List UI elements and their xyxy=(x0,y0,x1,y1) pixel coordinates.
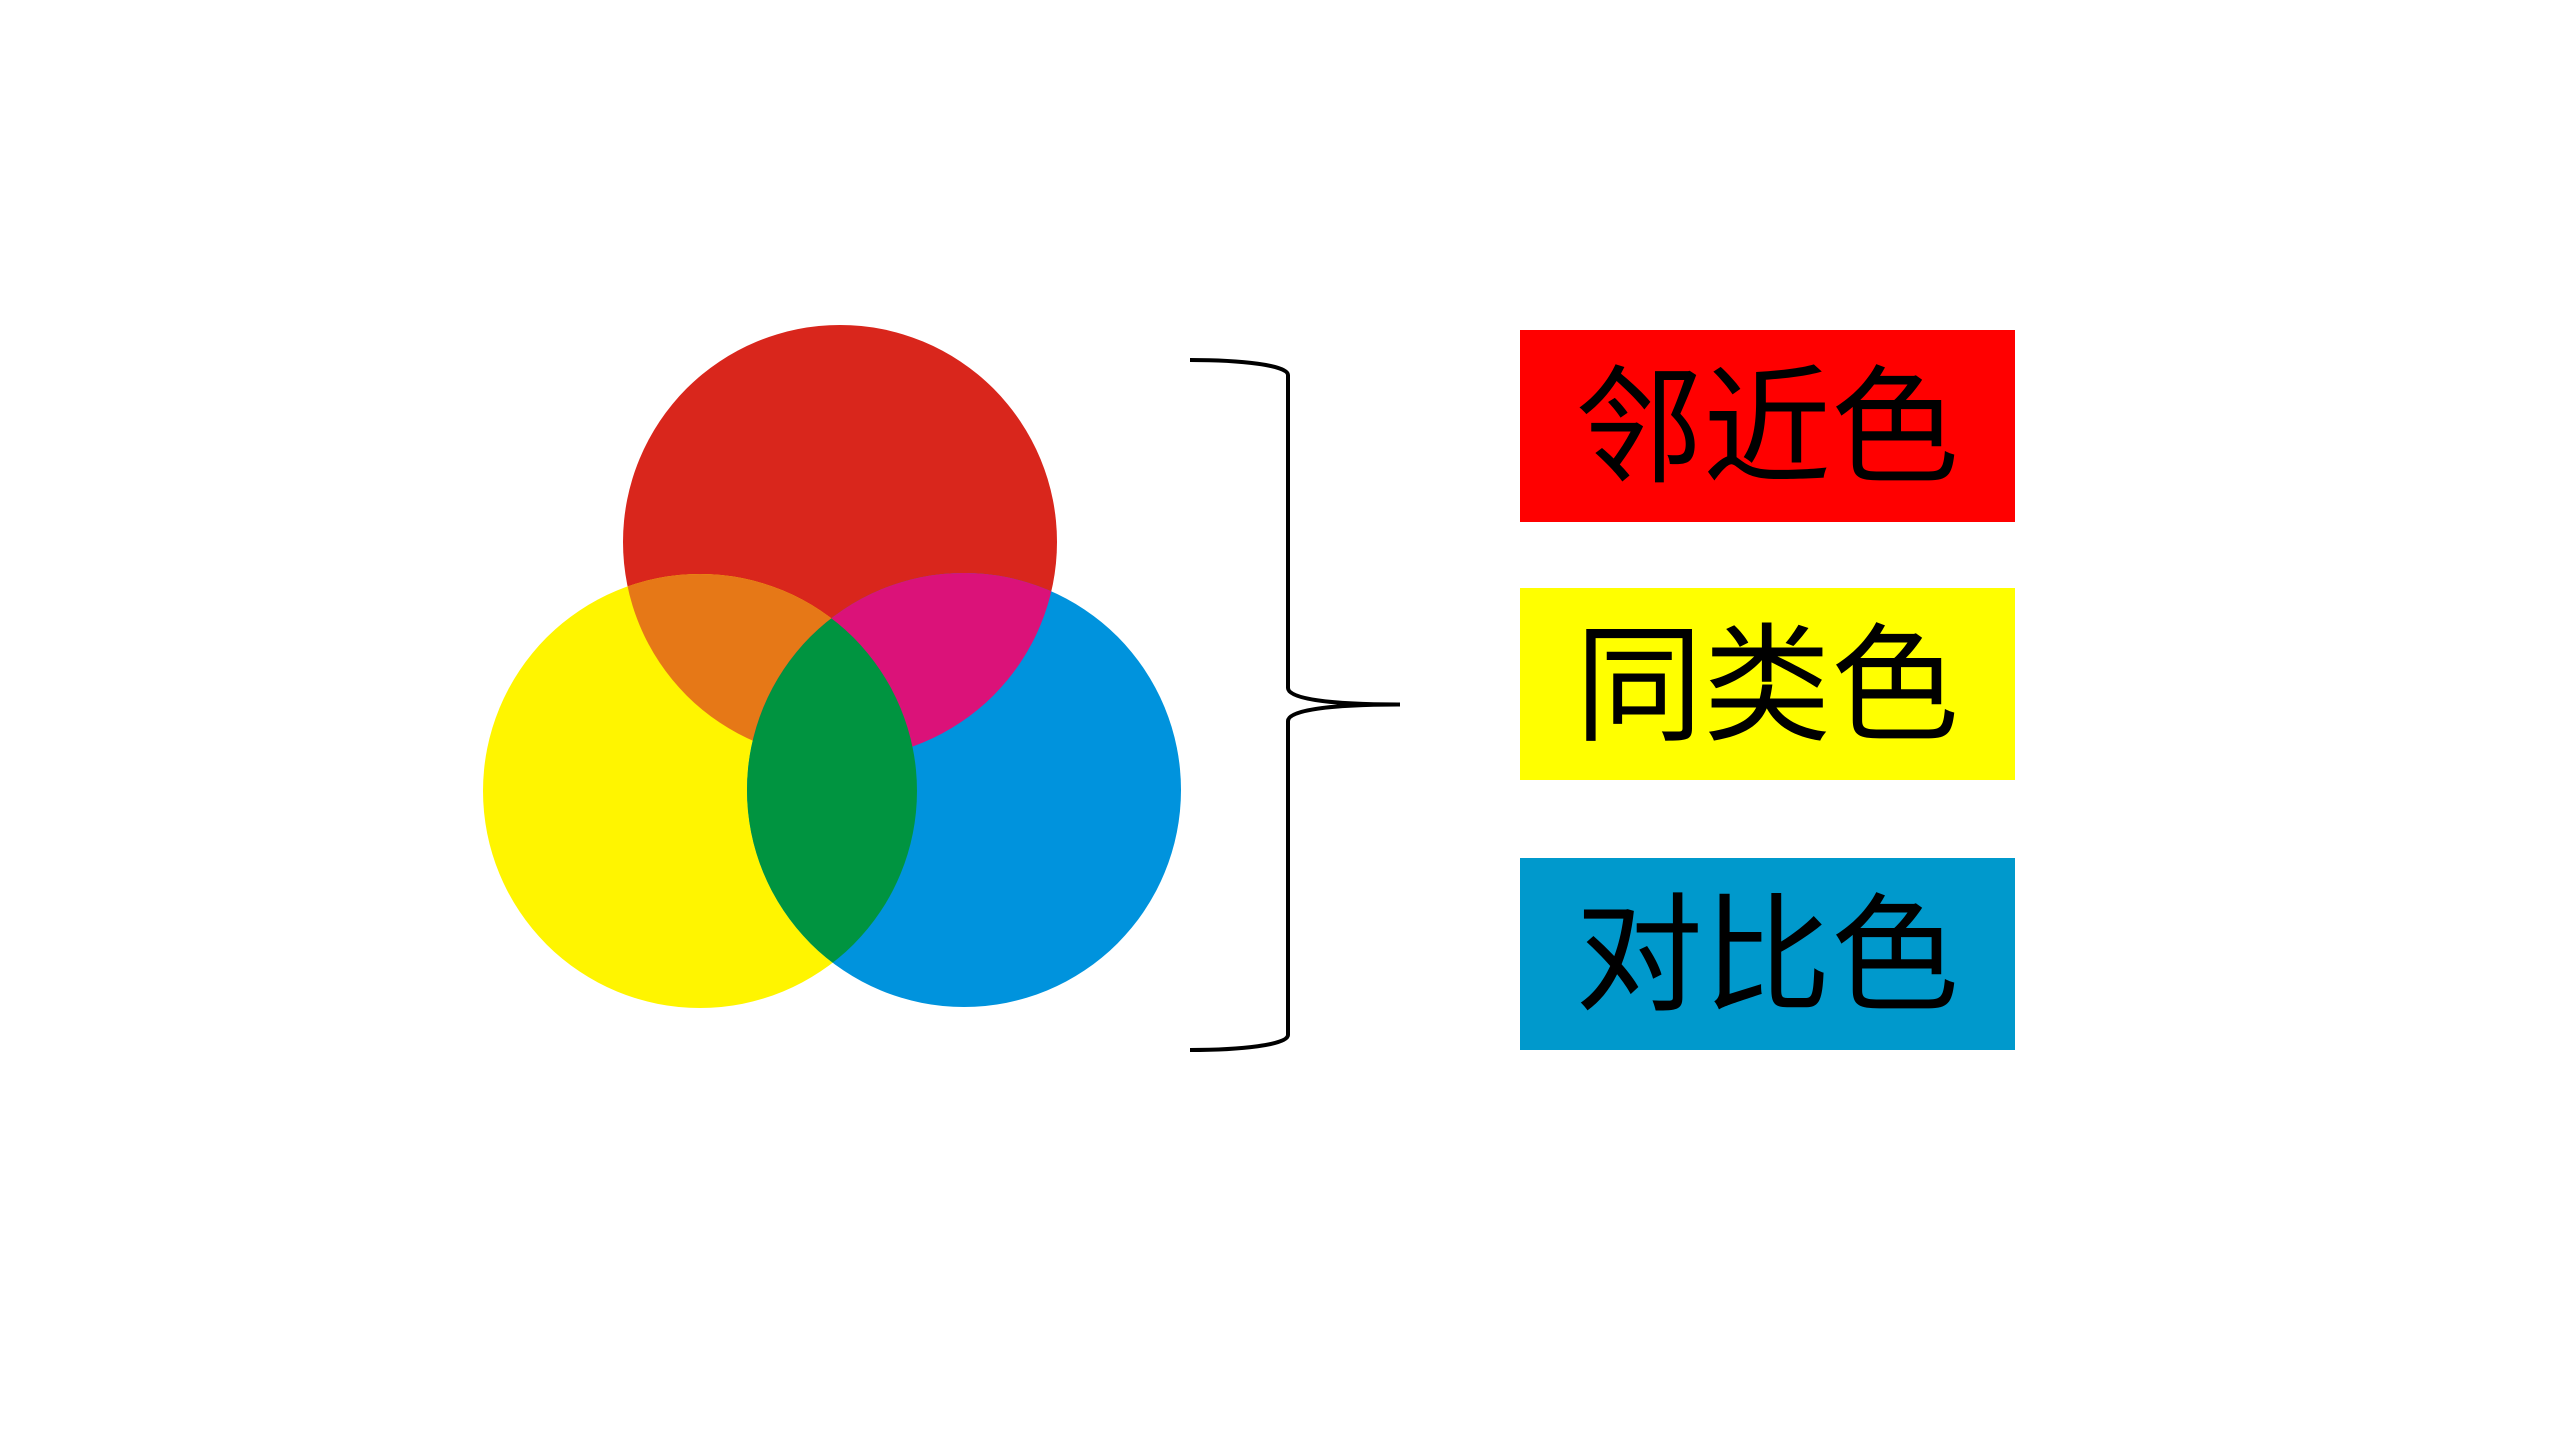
label box: analogous colours, yellow: 同类色 xyxy=(1575,582,1959,767)
overlap: red and blue, magenta xyxy=(752,573,1052,747)
circle: blue xyxy=(747,573,1181,1007)
overlap: red and yellow, orange xyxy=(628,574,832,741)
circle: red xyxy=(623,325,1057,759)
overlap: yellow and blue, green xyxy=(747,618,917,963)
right curly brace xyxy=(1190,360,1400,1050)
label box: contrasting colours, blue: 对比色 xyxy=(1575,852,1959,1037)
label box: adjacent colours, red: 邻近色 xyxy=(1575,324,1959,509)
circle: yellow xyxy=(483,574,917,1008)
colour wheel: three overlapping circles xyxy=(483,325,1181,1008)
